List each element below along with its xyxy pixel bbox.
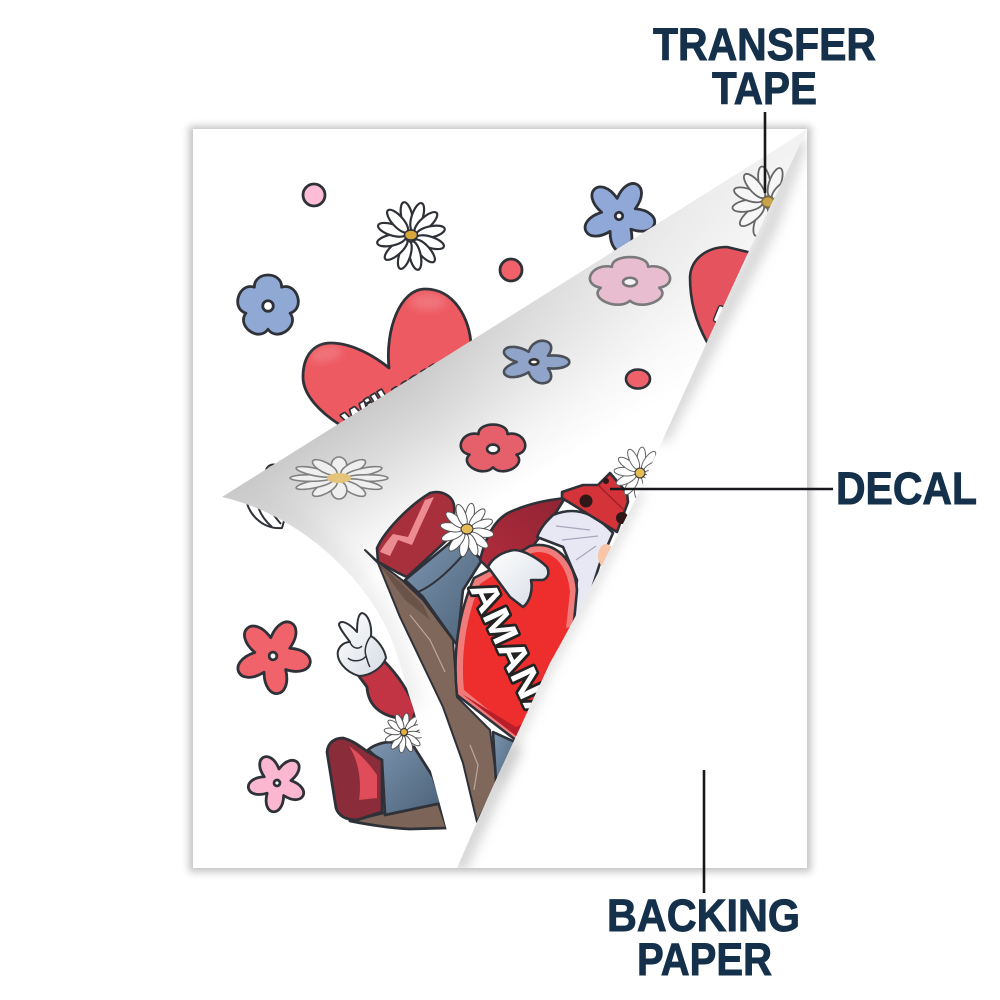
daisy: on lower gnome: [381, 710, 427, 756]
flower: blue star: [504, 341, 569, 383]
ground: [350, 802, 447, 829]
glove outline peeking below the fold: [246, 496, 290, 528]
flower: blue star: [573, 167, 667, 260]
beard: [537, 511, 613, 622]
hat: [562, 473, 628, 532]
leg: under heart: [493, 732, 515, 790]
heart lettering: Will you: [338, 355, 446, 437]
sheet: [193, 128, 810, 870]
flower: red: [461, 425, 525, 471]
label: transfer tape: TAPE: [712, 63, 817, 114]
flower: red star: [226, 605, 323, 702]
leg: [368, 742, 442, 815]
label: backing paper: BACKING: [607, 890, 800, 941]
boot: [327, 738, 382, 820]
tape highlight: [222, 130, 807, 500]
dot: pink: [303, 184, 325, 206]
daisy: on boot: [440, 502, 494, 558]
gnome upper half: [365, 445, 668, 822]
glove on heart: [488, 550, 548, 607]
tree trunk: [365, 550, 497, 822]
arrow: decal pointer: [610, 488, 833, 490]
leg: raised: [405, 537, 482, 645]
curved lower edge shading: [304, 528, 420, 705]
daisy: on hat: [614, 446, 656, 498]
name text on heart: AMANA: [462, 574, 565, 733]
gnome lower half: [327, 613, 447, 829]
label: transfer tape: [653, 19, 876, 114]
curl shading: [457, 128, 808, 870]
arrow: backing paper pointer: [703, 770, 705, 893]
dot: red: [626, 370, 650, 388]
label: backing paper: PAPER: [637, 934, 772, 985]
curl surface: [457, 130, 807, 868]
label: backing paper: [607, 890, 800, 985]
heart: large red: [303, 289, 471, 440]
tape surface: [222, 130, 807, 868]
dot: red: [500, 259, 522, 281]
flower: pink star: [240, 743, 317, 820]
panel: backing paper curl: [457, 128, 808, 870]
boot: raised: [377, 492, 454, 577]
label: transfer tape: TRANSFER: [653, 19, 876, 70]
nose: [598, 544, 612, 566]
decal artwork on the flipped layer: [290, 160, 810, 822]
heart: small red half: [690, 247, 752, 350]
body sleeve: [480, 498, 565, 572]
flower: blue: [238, 275, 298, 334]
label: decal: DECAL: [836, 463, 977, 514]
sheet shadow: [189, 126, 811, 872]
daisy: top corner: [732, 166, 784, 237]
panel: transfer tape curled over: [222, 130, 810, 868]
heart: big red: [454, 544, 578, 740]
back artwork: flowers and heart on the exposed sheet: [226, 167, 667, 829]
daisy: top: [370, 195, 452, 277]
fragment above the tape edge: [266, 465, 278, 470]
arrow: transfer tape pointer: [764, 112, 766, 193]
flower: pink: [590, 257, 670, 305]
daisy: gray flipped: [290, 457, 388, 499]
glove: peace sign: [338, 613, 386, 676]
arm: [358, 660, 416, 722]
